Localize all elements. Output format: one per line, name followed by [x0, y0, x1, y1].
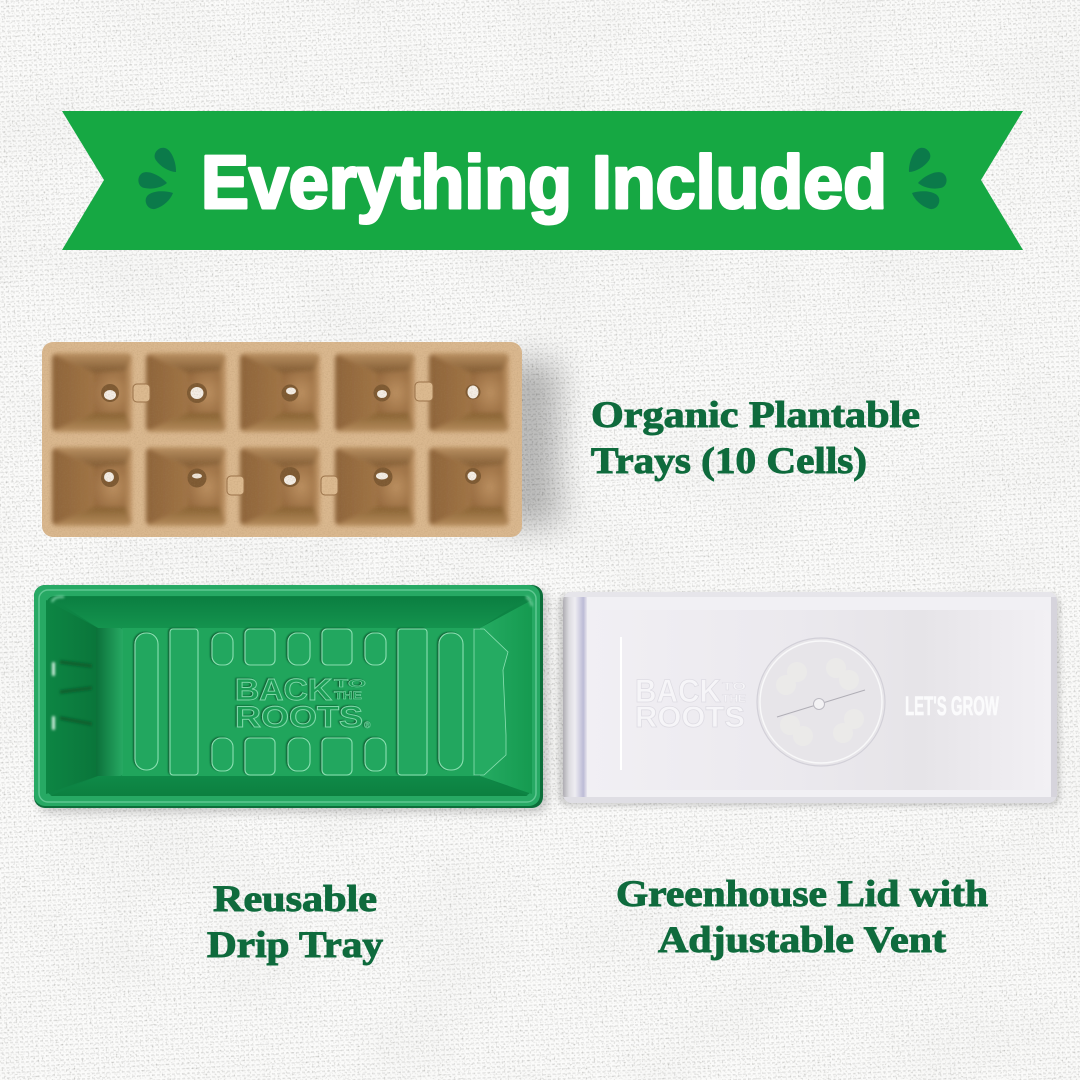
- label: greenhouse lid with adjustable vent: Greenhouse Lid with: [616, 874, 988, 915]
- photo: clear greenhouse lid: [558, 592, 1060, 806]
- banner: Everything Included: [62, 111, 1023, 250]
- label: greenhouse lid with adjustable vent: Adjustable Vent: [658, 920, 947, 961]
- embossed logo: ®: [364, 720, 371, 730]
- embossed lid logo: BACK: [635, 673, 721, 709]
- embossed logo: ROOTS: [235, 701, 363, 734]
- label: reusable drip tray: Reusable: [213, 879, 377, 920]
- tray inner walls: [46, 597, 532, 796]
- photo: organic plantable peat tray: [42, 342, 560, 537]
- cell connector tabs: [133, 382, 433, 495]
- tray floor: [122, 628, 474, 776]
- tray wall ribs and corner highlights: [52, 597, 532, 730]
- icon: right leaf sprig: [902, 145, 947, 212]
- embossed lid logo: THE: [722, 693, 746, 705]
- label: greenhouse lid with adjustable vent: [616, 874, 988, 961]
- drainage holes: [101, 383, 481, 488]
- right end panel: [474, 629, 508, 775]
- embossed lid logo: ROOTS: [635, 701, 745, 734]
- embossed logo: [235, 672, 371, 734]
- adjustable vent dial: [757, 638, 885, 766]
- photo: green reusable drip tray: [34, 585, 548, 812]
- label: organic plantable trays: Trays (10 Cells): [591, 441, 867, 482]
- label: reusable drip tray: Drip Tray: [207, 925, 384, 966]
- label: organic plantable trays: [591, 395, 920, 482]
- label: reusable drip tray: [207, 879, 384, 966]
- embossed lid logo: [635, 673, 747, 734]
- embossed lid logo: TO: [722, 681, 747, 693]
- embossed logo: TO: [334, 678, 367, 690]
- label: organic plantable trays: Organic Plantable: [591, 395, 920, 436]
- icon: left leaf sprig: [138, 145, 183, 212]
- embossed text: let's grow: LET'S GROW: [905, 691, 999, 721]
- embossed logo: BACK: [235, 672, 333, 707]
- embossed floor ribs: [135, 629, 463, 775]
- embossed logo: THE: [334, 690, 362, 702]
- banner title: Everything Included: [201, 140, 887, 224]
